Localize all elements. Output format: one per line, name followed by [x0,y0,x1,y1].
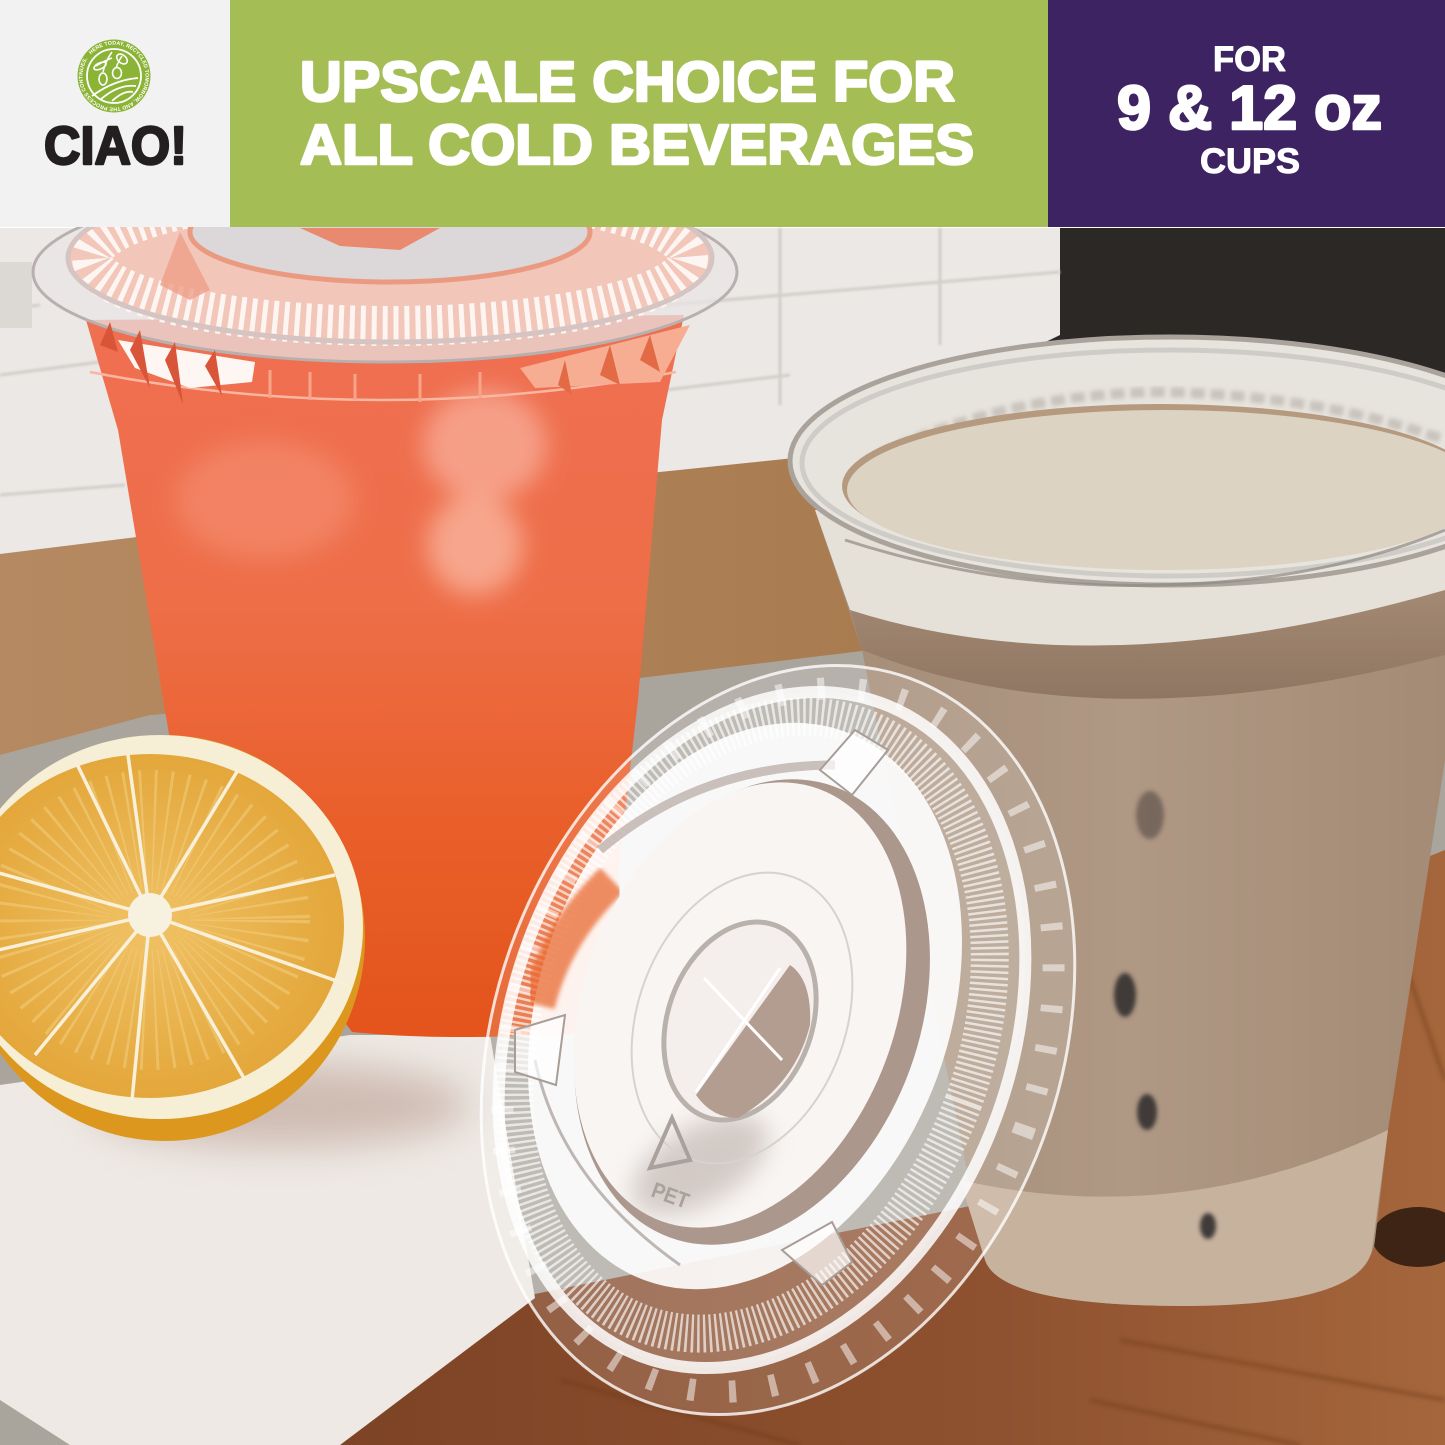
ribbed band [432,649,1072,1401]
shadow under lemon [90,1063,470,1147]
teeth left [118,340,255,388]
shaded groove [512,729,992,1295]
panel: logo [0,0,230,227]
dark tapioca spots [1114,791,1216,1239]
segment membranes [0,755,348,1100]
lid rim bright ring [68,174,712,342]
sip hole [637,901,843,1141]
text: cups: CUPS [1200,142,1300,181]
cup base band [960,1130,1388,1306]
lid outer flange [33,182,737,362]
wordmark: CIAO! [44,116,187,176]
panel: cup sizes [1048,0,1445,227]
heading line 2: ALL COLD BEVERAGES [300,113,974,177]
clear flat lid [380,581,1176,1445]
teeth centre [270,370,480,402]
icon: recycling badge: HERE TODAY, RECYCLED TOMORROW, AND THE PROCESS CONTINUES. [78,40,150,112]
drink surface [847,410,1445,570]
panel: headline [230,0,1048,227]
heading line 1: UPSCALE CHOICE FOR [300,50,955,114]
ice highlights [175,390,547,595]
cup body [86,315,684,1037]
recycle mark [650,1118,690,1168]
lemon core [128,893,172,937]
sip hole seen through lid [300,228,440,250]
vent tabs [515,730,888,1285]
lid central disc [190,182,590,282]
orange drink cup [33,174,737,1037]
text: for: FOR [1213,40,1286,79]
rim inner line [802,350,1445,576]
rib side tab [160,232,210,300]
wooden board [340,850,1445,1445]
lower shading [616,1095,784,1235]
cup rim line [90,372,676,400]
PET mark: PET [648,1177,693,1214]
front rim shine [845,530,1445,585]
flesh vesicle streaks [50,830,250,1010]
background: dark wall [1040,228,1445,488]
lower left ring line [535,1060,680,1265]
white ring [452,661,1038,1351]
grey band through ring [600,765,835,850]
milk tea cup [790,337,1445,1306]
dark shoulder band [835,560,1445,699]
inner rings [593,841,891,1195]
lid outer flange [380,581,1176,1445]
lid pink rib base [68,174,712,342]
teeth right [520,325,690,388]
cup body [815,510,1445,1306]
orange seen through ring [538,880,612,1005]
background: wall calendar paper [0,228,1060,556]
flange teeth [408,610,1148,1445]
bright outer ring [408,617,1116,1443]
lemon half [0,735,365,1141]
flesh [0,754,344,1098]
rind [0,735,365,1141]
cup rim [790,337,1445,585]
marble board [0,1035,535,1445]
lid ribs [92,190,688,326]
text: sizes: 9 & 12 oz [1117,74,1382,143]
inner disc [515,736,965,1274]
background: cardboard box [0,450,870,755]
drink edge [842,404,1445,568]
pith [0,735,363,1119]
condensation on inner wall [880,392,1445,455]
foam band [815,510,1445,646]
